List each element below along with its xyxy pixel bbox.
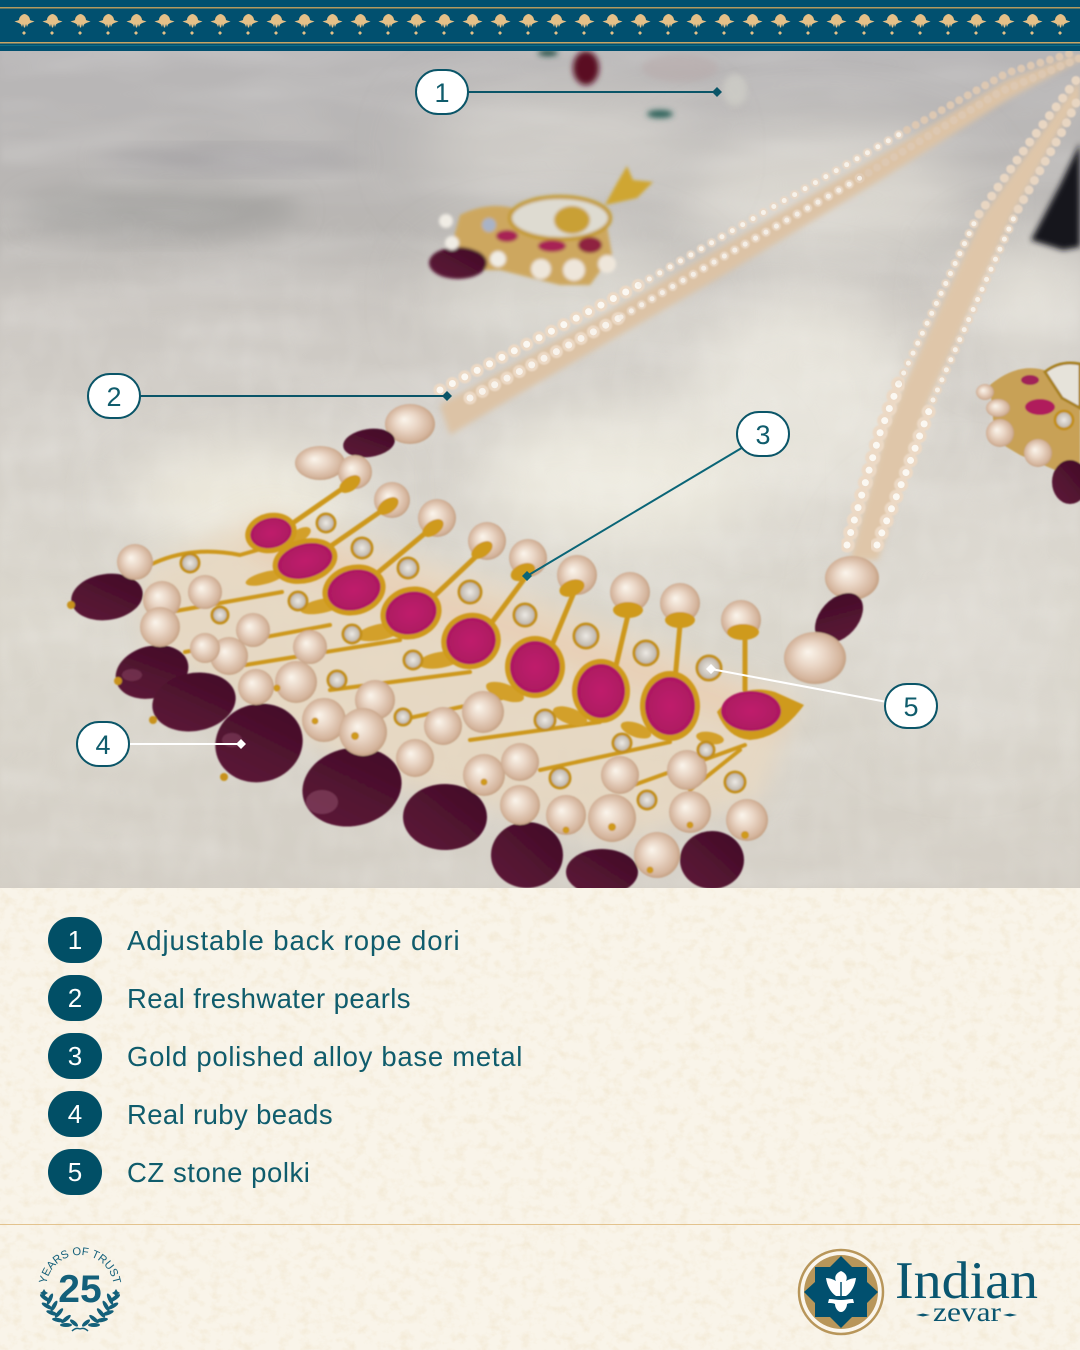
legend item 5: 5: [68, 1157, 82, 1187]
gold stems and frame: [150, 482, 745, 790]
earring, right: [976, 363, 1080, 504]
legend item 1: Adjustable back rope dori: [127, 925, 461, 956]
legend item 4: 4: [68, 1099, 82, 1129]
25 years of trust badge: 25: [58, 1268, 102, 1311]
gold connecting pieces: [244, 524, 725, 746]
25 years of trust badge: [38, 1247, 122, 1332]
legend item 1: [48, 917, 461, 963]
logo wordmark: zevar: [933, 1297, 1001, 1327]
pearl strands: [440, 52, 1080, 560]
callout 5: [706, 664, 937, 728]
legend item 4: Real ruby beads: [127, 1099, 333, 1130]
legend item 2: 2: [68, 983, 82, 1013]
gold gem settings: [241, 508, 804, 741]
legend item 5: CZ stone polki: [127, 1157, 310, 1188]
pink gems: [247, 514, 781, 735]
legend item 1: 1: [68, 925, 82, 955]
callout 1: 1: [434, 78, 450, 108]
logo emblem: [799, 1250, 883, 1334]
callout 2: [88, 374, 452, 418]
callout 2: 2: [106, 382, 122, 412]
legend item 2: [48, 975, 411, 1021]
callout 1: [416, 70, 722, 114]
product photo with callouts: [0, 0, 1080, 888]
callout 3: 3: [755, 420, 771, 450]
peach reflection under pendant: [140, 510, 800, 840]
callout 3: [522, 412, 789, 581]
legend item 5: [48, 1149, 310, 1195]
fur background: [0, 0, 1080, 888]
legend item 2: Real freshwater pearls: [127, 983, 411, 1014]
earring, centre: [429, 166, 653, 285]
pendant jewellery: [67, 404, 879, 895]
callout 5: 5: [903, 692, 919, 722]
callout 4: [77, 722, 246, 766]
logo wordmark: Indian: [895, 1252, 1038, 1310]
small pearls: [117, 455, 768, 878]
legend item 3: 3: [68, 1041, 82, 1071]
CZ polki stones: [181, 514, 745, 809]
ruby beads: [67, 569, 744, 895]
legend list: [48, 917, 523, 1195]
legend item 4: [48, 1091, 333, 1137]
25 years of trust badge: YEARS OF TRUST: [38, 1247, 122, 1282]
callout 4: 4: [95, 730, 111, 760]
legend item 3: [48, 1033, 523, 1079]
legend item 3: Gold polished alloy base metal: [127, 1041, 523, 1072]
header band: [0, 0, 1080, 51]
blurred items at top: [538, 50, 1080, 250]
gold caps and pins: [274, 471, 759, 874]
strand end beads: [295, 404, 879, 684]
paper background panel: [0, 888, 1080, 1350]
